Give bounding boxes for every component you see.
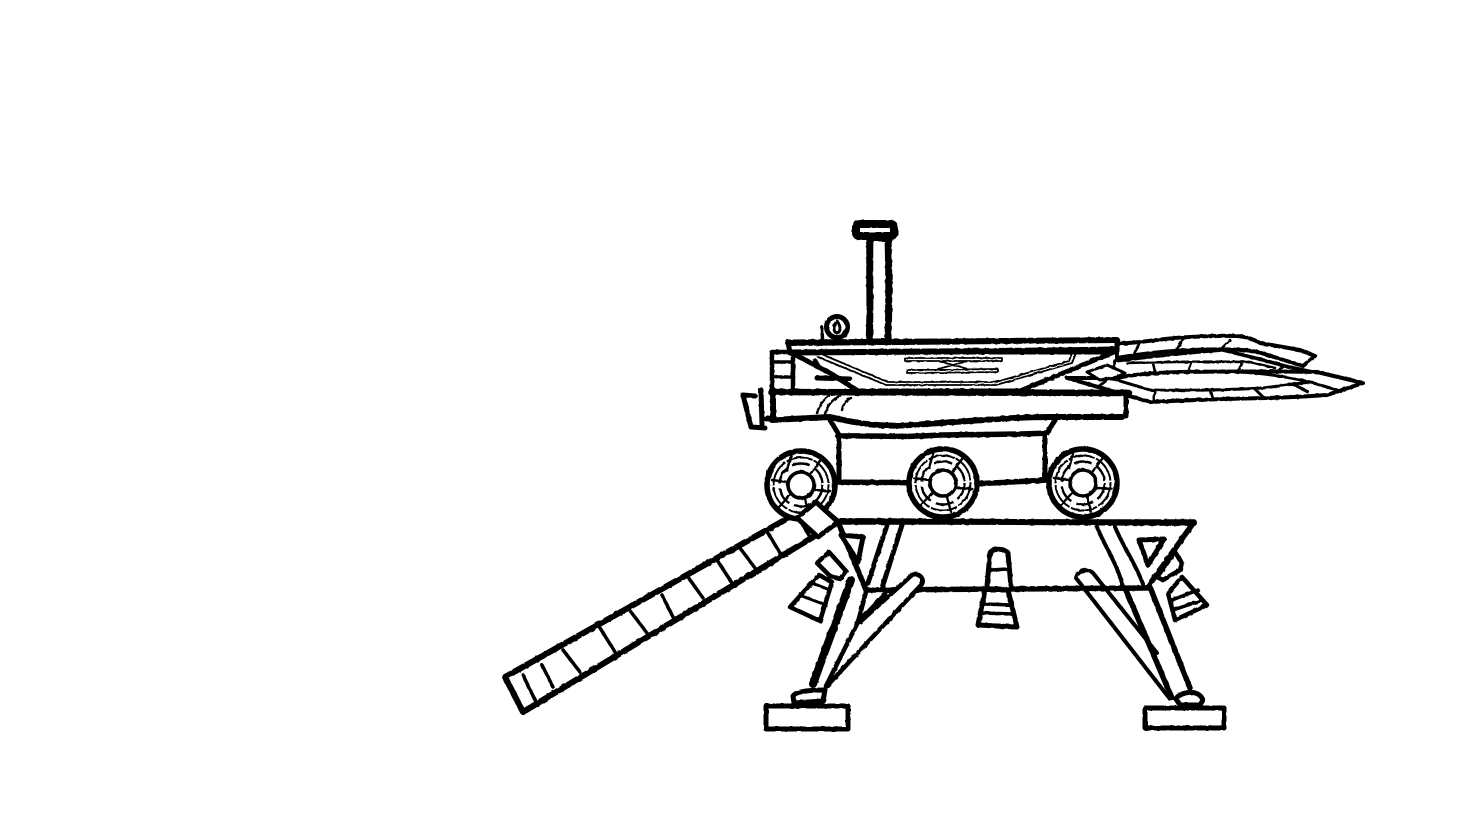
lander body [838, 522, 1194, 590]
middle wheel [909, 449, 977, 517]
lower wing [1067, 372, 1363, 402]
ramp [505, 503, 838, 712]
right landing leg [1076, 570, 1224, 728]
middle wing [1110, 350, 1363, 398]
left landing leg [766, 574, 923, 729]
rover lower slab [771, 390, 1129, 426]
upper wing panel ticks [1134, 338, 1230, 354]
illustration: lander and rover [505, 224, 1363, 729]
right triangle vent [1139, 539, 1164, 565]
left triangle vent [841, 535, 863, 562]
lander deck line [838, 521, 1194, 523]
chassis [830, 417, 1057, 521]
ramp top hinge [797, 502, 838, 537]
solar wings [1067, 336, 1363, 402]
hook [743, 390, 770, 428]
camera [822, 316, 848, 342]
right wheel [1049, 449, 1117, 517]
mast [856, 224, 894, 342]
left equipment block [772, 352, 793, 392]
left thruster [790, 552, 846, 621]
lower wing inner panel [1098, 372, 1337, 402]
centre thruster [978, 549, 1017, 627]
wing hinge [1087, 365, 1125, 380]
middle wing ticks [1127, 362, 1283, 372]
right thruster [1157, 552, 1207, 620]
rover top body [788, 340, 1117, 391]
left wheel [767, 451, 835, 519]
upper wing [1117, 336, 1315, 366]
